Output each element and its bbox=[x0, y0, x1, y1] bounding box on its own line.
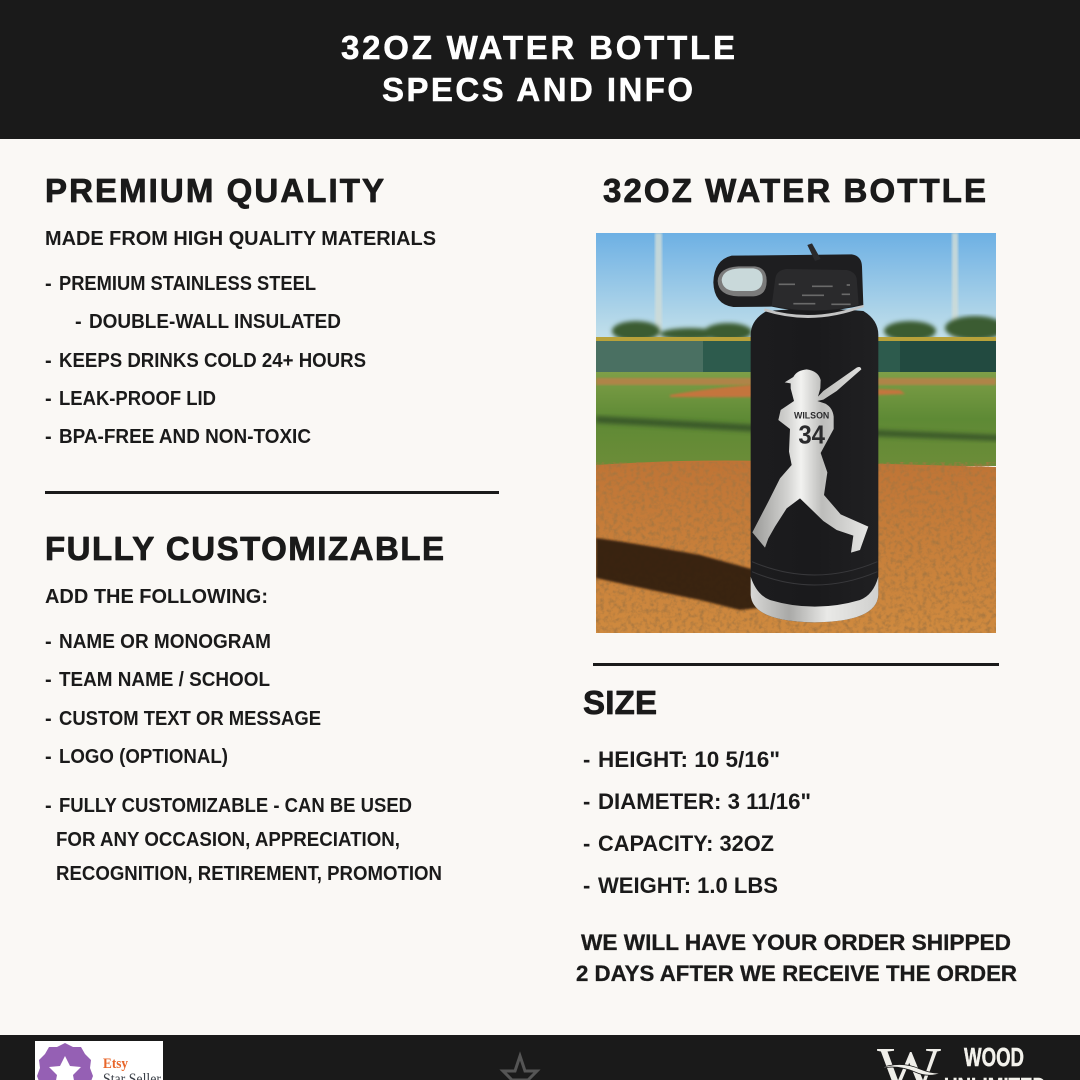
shipping note bbox=[576, 930, 1017, 986]
text block: occasions: FOR ANY OCCASION, APPRECIATION, bbox=[56, 829, 400, 851]
panel: premium quality bbox=[45, 172, 436, 448]
list: quality features: - bbox=[75, 311, 82, 333]
jersey name: WILSON bbox=[794, 411, 830, 421]
wood unlimited logo bbox=[877, 1036, 1046, 1080]
title bbox=[341, 29, 735, 108]
list: customization options: NAME OR MONOGRAM bbox=[59, 631, 271, 653]
list: quality features: DOUBLE-WALL INSULATED bbox=[89, 311, 341, 333]
logo wordmark: WOOD bbox=[964, 1042, 1024, 1072]
list: customization options: - bbox=[45, 746, 52, 768]
intro: add the following: ADD THE FOLLOWING: bbox=[45, 586, 268, 608]
list: quality features: BPA-FREE AND NON-TOXIC bbox=[59, 426, 311, 448]
list: dimensions: CAPACITY: 32OZ bbox=[598, 831, 774, 856]
list: dimensions: DIAMETER: 3 11/16" bbox=[598, 789, 811, 814]
title: 32OZ WATER BOTTLE bbox=[341, 29, 735, 66]
badge label: Etsy bbox=[103, 1056, 128, 1072]
steel base bbox=[751, 577, 878, 622]
list: quality features: PREMIUM STAINLESS STEEL bbox=[59, 273, 316, 295]
list: dimensions: WEIGHT: 1.0 LBS bbox=[598, 873, 778, 898]
straw bbox=[807, 243, 821, 261]
badge rosette bbox=[37, 1043, 93, 1080]
screw cap with ridges bbox=[772, 269, 859, 311]
panel: size bbox=[583, 684, 811, 898]
loop handle and top plate bbox=[713, 254, 863, 311]
list: customization options: CUSTOM TEXT OR MESSAGE bbox=[59, 708, 321, 730]
loop opening bbox=[718, 266, 767, 296]
logo wordmark bbox=[944, 1042, 1046, 1080]
list: customization options: - bbox=[45, 631, 52, 653]
footer band bbox=[0, 1035, 1080, 1080]
icon: star outline bbox=[503, 1056, 537, 1080]
list: customization options: - bbox=[45, 708, 52, 730]
etsy star seller badge bbox=[35, 1041, 163, 1080]
base ridges bbox=[752, 562, 877, 585]
list: quality features: - bbox=[45, 350, 52, 372]
title: SPECS AND INFO bbox=[382, 71, 693, 108]
list: dimensions: - bbox=[583, 747, 590, 772]
heading: product name: 32OZ WATER BOTTLE bbox=[603, 172, 986, 209]
list: dimensions bbox=[583, 747, 811, 898]
list: dimensions: - bbox=[583, 873, 590, 898]
photo background: baseball field bbox=[596, 233, 1005, 633]
heading: size: SIZE bbox=[583, 684, 657, 721]
list: dimensions: HEIGHT: 10 5/16" bbox=[598, 747, 780, 772]
lid bbox=[713, 254, 863, 311]
heading: fully customizable: FULLY CUSTOMIZABLE bbox=[45, 530, 444, 567]
intro: materials: MADE FROM HIGH QUALITY MATERIALS bbox=[45, 228, 436, 250]
list: quality features bbox=[45, 273, 366, 448]
header band bbox=[0, 0, 1080, 139]
heading: premium quality: PREMIUM QUALITY bbox=[45, 172, 384, 209]
engraved batter bbox=[752, 367, 868, 553]
list: quality features: KEEPS DRINKS COLD 24+ HOURS bbox=[59, 350, 366, 372]
text block: occasions: - bbox=[45, 795, 52, 817]
list: quality features: - bbox=[45, 426, 52, 448]
text block: occasions bbox=[45, 795, 442, 885]
list: customization options: TEAM NAME / SCHOOL bbox=[59, 669, 270, 691]
list: customization options bbox=[45, 631, 321, 768]
product photo bbox=[596, 233, 1005, 633]
neck ring bbox=[764, 304, 864, 318]
badge label bbox=[103, 1058, 161, 1080]
text block: occasions: FULLY CUSTOMIZABLE - CAN BE USED bbox=[59, 795, 412, 817]
shipping note: 2 DAYS AFTER WE RECEIVE THE ORDER bbox=[576, 961, 1017, 986]
list: customization options: - bbox=[45, 669, 52, 691]
bottle bbox=[713, 243, 878, 622]
list: customization options: LOGO (OPTIONAL) bbox=[59, 746, 228, 768]
jersey number: 34 bbox=[798, 420, 826, 450]
ground shadow bbox=[596, 538, 757, 610]
list: dimensions: - bbox=[583, 831, 590, 856]
badge star bbox=[49, 1056, 81, 1080]
shipping note: WE WILL HAVE YOUR ORDER SHIPPED bbox=[581, 930, 1011, 955]
list: dimensions: - bbox=[583, 789, 590, 814]
bottle body bbox=[751, 309, 878, 622]
list: quality features: LEAK-PROOF LID bbox=[59, 388, 216, 410]
text block: occasions: RECOGNITION, RETIREMENT, PROMOTION bbox=[56, 863, 442, 885]
list: quality features: - bbox=[45, 273, 52, 295]
list: quality features: - bbox=[45, 388, 52, 410]
panel: fully customizable bbox=[45, 530, 444, 885]
